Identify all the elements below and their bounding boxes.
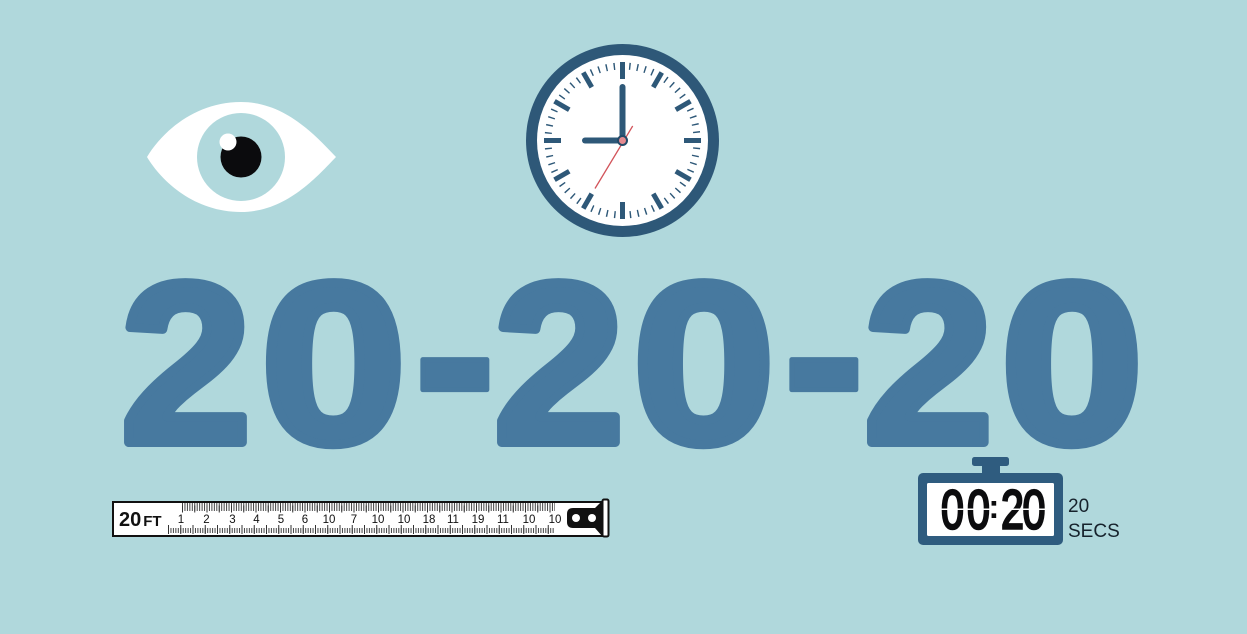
tape scale numbers: 10 (398, 514, 410, 526)
title: 20-20-20: 2 (494, 237, 625, 492)
icon: wall clock at nine o'clock (526, 44, 719, 237)
tape scale numbers: 11 (497, 514, 509, 526)
tape scale numbers: 1 (178, 514, 184, 526)
tape scale numbers: 11 (447, 514, 459, 526)
tape scale numbers: 10 (372, 514, 384, 526)
timer readout: 0 (1022, 480, 1045, 541)
timer readout: 0 (967, 480, 990, 541)
timer readout: : (988, 488, 999, 525)
title: 20-20-20: 0 (261, 236, 406, 492)
tape scale numbers: 5 (278, 514, 284, 526)
icon: digital timer (918, 457, 1063, 545)
icon: measuring tape, 20 feet (113, 500, 608, 536)
icon: eye (147, 102, 336, 212)
tape tick marks (168, 507, 555, 530)
tape scale numbers: 3 (229, 514, 236, 526)
tape scale numbers: 18 (423, 514, 435, 526)
tape scale numbers: 19 (472, 514, 484, 526)
timer readout (941, 480, 1045, 541)
tape scale numbers (178, 514, 561, 526)
tape scale numbers: 4 (253, 514, 260, 526)
title: 20-20-20: 2 (864, 237, 993, 492)
tape scale numbers: 10 (523, 514, 535, 526)
timer readout: 0 (941, 480, 964, 541)
timer caption: 20 secs (1068, 496, 1120, 542)
timer readout: 2 (1001, 480, 1024, 541)
title: 20-20-20: 0 (633, 236, 775, 492)
tape scale numbers: 10 (323, 514, 335, 526)
title: 20-20-20: 2 (120, 237, 252, 492)
tape scale numbers: 7 (351, 514, 357, 526)
tape length label: 20FT (119, 509, 162, 531)
title: 20-20-20: - (413, 213, 497, 494)
timer caption: 20 secs: SECS (1068, 521, 1120, 542)
title: 20-20-20 (120, 213, 1143, 494)
tape scale numbers: 2 (203, 514, 210, 526)
tape scale numbers: 10 (549, 514, 561, 526)
title: 20-20-20: - (782, 213, 866, 494)
title: 20-20-20: 0 (1001, 235, 1143, 491)
tape scale numbers: 6 (302, 514, 308, 526)
timer caption: 20 secs: 20 (1068, 496, 1089, 517)
tape end hook (567, 500, 608, 536)
